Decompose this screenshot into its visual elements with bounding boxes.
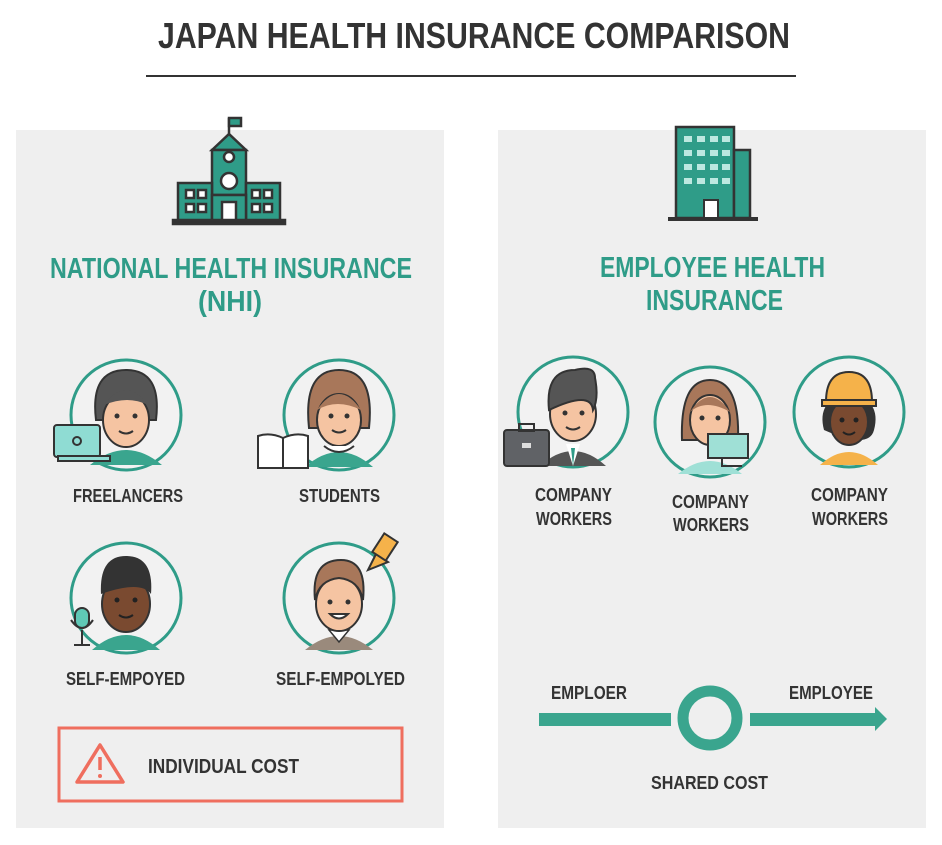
label: company workers 1: COMPANY — [535, 485, 612, 505]
icon: town hall building — [173, 118, 285, 224]
person: self-employed 1 — [71, 543, 181, 653]
arrow: shared cost flow: SHARED COST — [651, 773, 768, 793]
person: self-employed 2 — [284, 533, 398, 653]
label: company workers 2: WORKERS — [673, 515, 749, 535]
label: self-empoyed: SELF-EMPOYED — [66, 669, 185, 689]
heading: employee health insurance: EMPLOYEE HEALTH — [600, 252, 825, 284]
heading: NHI — [50, 253, 412, 318]
title: JAPAN HEALTH INSURANCE COMPARISON — [158, 15, 790, 56]
heading: NHI: NATIONAL HEALTH INSURANCE — [50, 253, 412, 285]
person: company worker office — [655, 367, 765, 477]
label: freelancers: FREELANCERS — [73, 486, 183, 506]
label: company workers 3: COMPANY — [811, 485, 888, 505]
heading: employee health insurance: INSURANCE — [646, 285, 783, 317]
label: company workers 1 — [535, 485, 612, 529]
label: company workers 2 — [672, 492, 749, 535]
label: company workers 1: WORKERS — [536, 509, 612, 529]
arrow: shared cost flow — [539, 683, 887, 793]
person: company worker businessman — [504, 357, 628, 467]
arrow: shared cost flow: EMPLOYEE — [789, 683, 873, 703]
label: company workers 3 — [811, 485, 888, 529]
person: students — [258, 360, 394, 470]
arrow: shared cost flow: EMPLOER — [551, 683, 627, 703]
panel: employee health insurance — [498, 127, 926, 828]
heading: employee health insurance — [600, 252, 825, 317]
heading: NHI: (NHI) — [198, 286, 262, 318]
panel: national health insurance — [16, 118, 444, 828]
callout: individual cost: INDIVIDUAL COST — [148, 756, 299, 778]
label: company workers 2: COMPANY — [672, 492, 749, 512]
person: freelancers — [54, 360, 181, 470]
icon: office building — [668, 127, 758, 221]
callout: individual cost — [59, 728, 402, 801]
label: students: STUDENTS — [299, 486, 380, 506]
person: company worker construction — [794, 357, 904, 467]
label: self-empolyed: SELF-EMPOLYED — [276, 669, 405, 689]
label: company workers 3: WORKERS — [812, 509, 888, 529]
